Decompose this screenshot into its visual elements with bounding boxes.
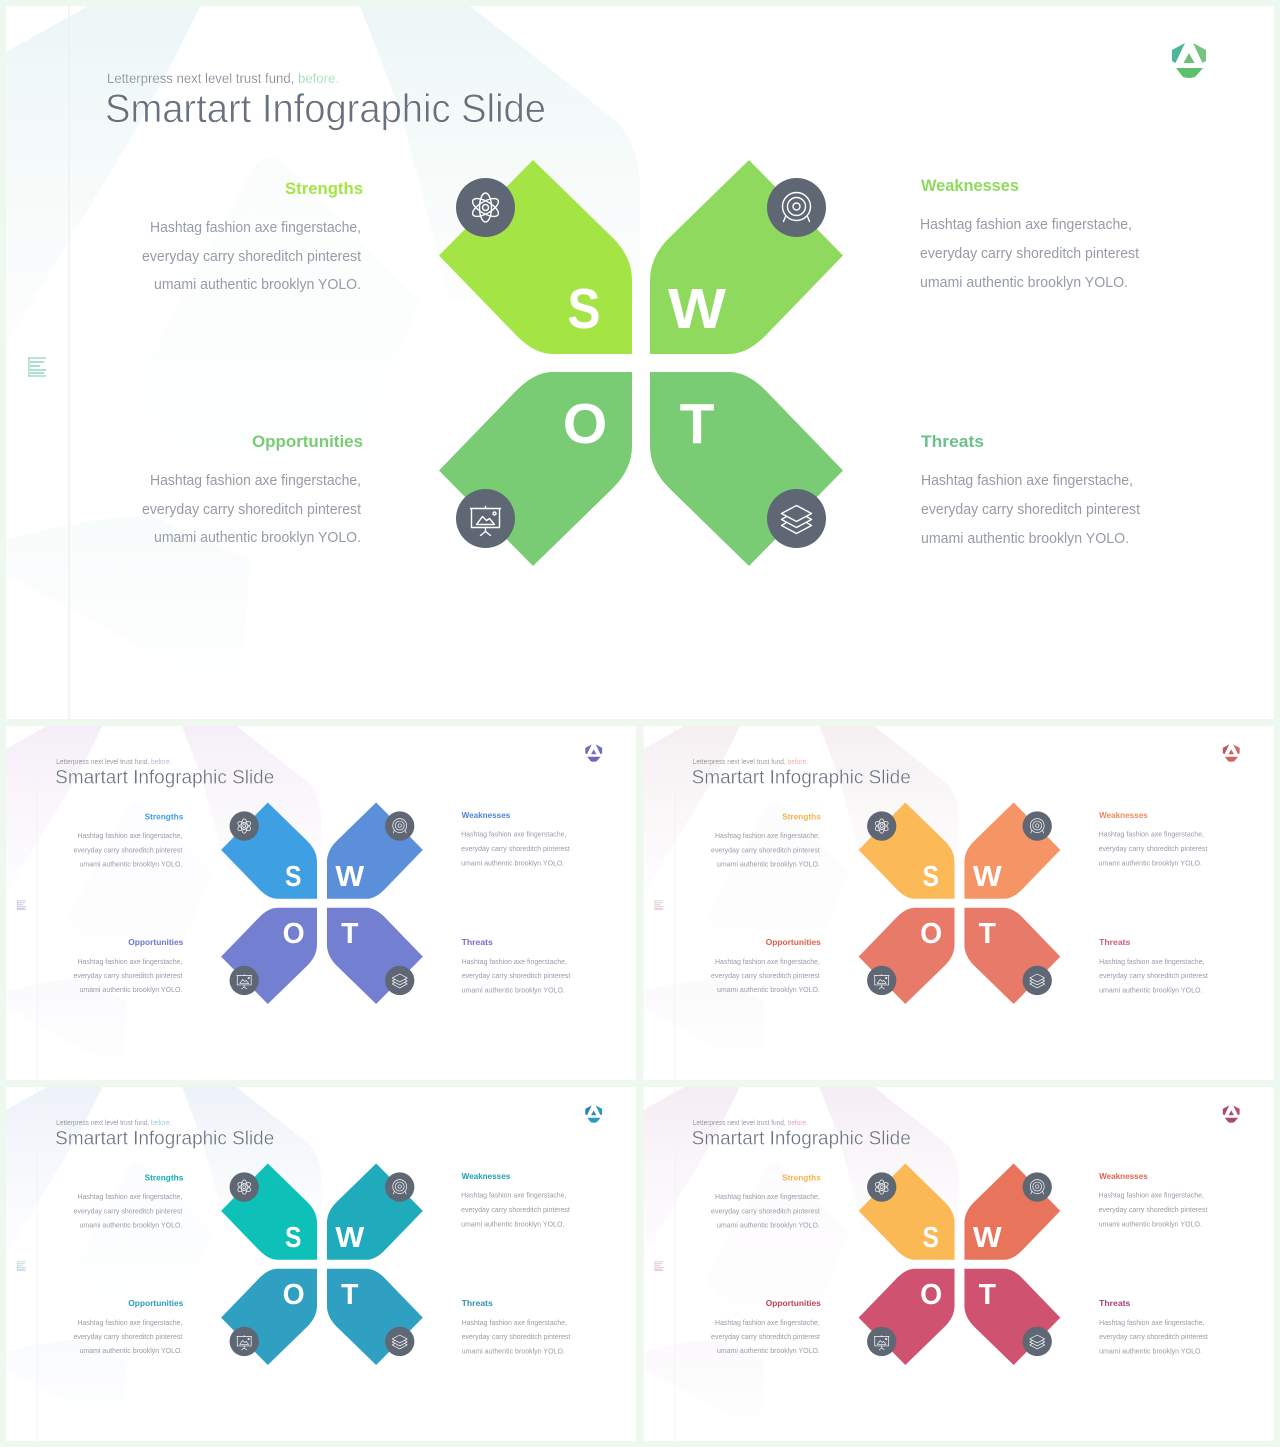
text: threats <box>1099 1298 1208 1356</box>
text: weaknesses: Weaknesses <box>462 810 511 820</box>
title: Smartart Infographic Slide <box>55 1128 274 1150</box>
icon: side menu <box>654 901 663 910</box>
text: strengths: Hashtag fashion axe fingerstache, <box>150 220 361 236</box>
icon: logo <box>1223 744 1240 762</box>
text: threats: Hashtag fashion axe fingerstache, <box>462 957 567 966</box>
icon: side menu <box>28 358 46 376</box>
text: opportunities: everyday carry shoreditch pinterest <box>74 971 182 980</box>
panel: teal slide <box>6 1087 636 1441</box>
text: opportunities: umami authentic brooklyn YOLO. <box>717 1346 820 1355</box>
text: strengths: umami authentic brooklyn YOLO. <box>80 1221 182 1230</box>
petal: opportunities <box>221 908 317 1004</box>
title: Smartart Infographic Slide <box>692 767 911 789</box>
text: opportunities: Opportunities <box>128 937 184 947</box>
text: opportunities <box>142 432 363 546</box>
petal: threats <box>964 1269 1060 1365</box>
text: threats: everyday carry shoreditch pinterest <box>462 971 570 980</box>
text: opportunities: Hashtag fashion axe fingerstache, <box>715 1318 820 1327</box>
letter S: S <box>922 1221 939 1253</box>
text: opportunities: everyday carry shoreditch pinterest <box>74 1332 182 1341</box>
text: weaknesses: everyday carry shoreditch pinterest <box>920 246 1139 262</box>
text: threats: umami authentic brooklyn YOLO. <box>462 1347 565 1356</box>
letter O: O <box>283 917 305 949</box>
icon: atom <box>456 178 515 237</box>
letter S: S <box>285 860 301 892</box>
letter W: W <box>335 1221 364 1253</box>
icon: presentation <box>456 489 515 548</box>
icon: logo <box>585 744 602 762</box>
text: strengths: everyday carry shoreditch pinterest <box>142 249 361 265</box>
text: strengths: everyday carry shoreditch pinterest <box>711 1207 820 1216</box>
petal: opportunities <box>439 372 632 566</box>
petal: weaknesses <box>964 802 1060 899</box>
icon: side menu <box>17 901 26 910</box>
text: weaknesses <box>461 1171 570 1229</box>
petal: strengths <box>221 1163 317 1260</box>
subtitle: Letterpress next level trust fund, before. <box>693 759 808 766</box>
icon: layers <box>1023 1327 1052 1356</box>
text: threats <box>462 1298 570 1356</box>
icon: atom <box>867 1172 896 1202</box>
petal: opportunities <box>859 908 954 1004</box>
text: strengths: Hashtag fashion axe fingerstache, <box>715 1192 820 1201</box>
icon: logo <box>1172 43 1206 78</box>
text: threats: umami authentic brooklyn YOLO. <box>1099 1347 1202 1356</box>
letter O: O <box>920 917 942 949</box>
text: threats: everyday carry shoreditch pinterest <box>921 502 1140 518</box>
text: strengths: umami authentic brooklyn YOLO. <box>80 860 182 869</box>
petal: threats <box>327 1269 423 1365</box>
text: weaknesses: Weaknesses <box>921 176 1019 195</box>
petal: strengths <box>859 1163 954 1260</box>
text: opportunities: Opportunities <box>766 937 821 947</box>
text: threats: Hashtag fashion axe fingerstache, <box>1099 957 1204 966</box>
title: Smartart Infographic Slide <box>692 1128 911 1150</box>
text: strengths: everyday carry shoreditch pinterest <box>711 846 820 855</box>
subtitle: Letterpress next level trust fund, before. <box>56 759 171 766</box>
text: strengths: Strengths <box>145 1172 184 1182</box>
petal: strengths <box>859 802 954 899</box>
subtitle: Letterpress next level trust fund, before. <box>693 1120 808 1127</box>
text: weaknesses: Hashtag fashion axe fingerstache, <box>461 1191 566 1200</box>
icon: target <box>385 1172 414 1202</box>
text: threats: umami authentic brooklyn YOLO. <box>921 531 1129 547</box>
text: threats: Threats <box>462 937 493 947</box>
icon: side menu <box>17 1262 26 1271</box>
text: weaknesses <box>1099 1171 1207 1229</box>
petal: strengths <box>439 160 632 354</box>
petal: opportunities <box>221 1269 317 1365</box>
letter W: W <box>668 277 726 341</box>
letter T: T <box>979 917 996 949</box>
letter T: T <box>979 1278 996 1310</box>
text: strengths <box>711 811 821 869</box>
text: strengths: Hashtag fashion axe fingerstache, <box>78 831 182 840</box>
icon: presentation <box>230 966 259 995</box>
text: threats <box>921 432 1140 547</box>
text: strengths <box>74 811 184 869</box>
icon: atom <box>230 1172 259 1202</box>
text: strengths: everyday carry shoreditch pinterest <box>74 846 182 855</box>
subtitle: Letterpress next level trust fund, before. <box>56 1120 171 1127</box>
petal: weaknesses <box>964 1163 1060 1260</box>
text: threats: Threats <box>1099 937 1131 947</box>
icon: logo <box>1223 1105 1240 1123</box>
text: opportunities: Hashtag fashion axe fingerstache, <box>150 473 361 489</box>
icon: presentation <box>867 966 896 995</box>
letter O: O <box>920 1278 942 1310</box>
title: Smartart Infographic Slide <box>105 87 546 131</box>
icon: target <box>1023 811 1052 841</box>
text: opportunities: Hashtag fashion axe fingerstache, <box>78 1318 182 1327</box>
text: threats <box>1099 937 1208 995</box>
text: weaknesses: everyday carry shoreditch pinterest <box>1099 844 1207 853</box>
petal: opportunities <box>859 1269 954 1365</box>
text: opportunities: everyday carry shoreditch pinterest <box>711 1332 820 1341</box>
text: threats: umami authentic brooklyn YOLO. <box>1099 986 1202 995</box>
text: opportunities: Opportunities <box>128 1298 184 1308</box>
petal: threats <box>964 908 1060 1004</box>
petal: weaknesses <box>327 802 423 899</box>
text: weaknesses: Hashtag fashion axe fingerstache, <box>1099 830 1204 839</box>
text: weaknesses: Weaknesses <box>1099 810 1148 820</box>
text: weaknesses <box>461 810 570 868</box>
text: opportunities: umami authentic brooklyn YOLO. <box>717 985 820 994</box>
text: threats: Hashtag fashion axe fingerstache, <box>1099 1318 1204 1327</box>
text: strengths <box>711 1172 821 1230</box>
petal: weaknesses <box>327 1163 423 1260</box>
letter T: T <box>341 917 358 949</box>
text: opportunities <box>74 1298 184 1355</box>
letter W: W <box>973 860 1002 892</box>
text: strengths: Strengths <box>782 1172 821 1182</box>
petal: weaknesses <box>650 160 843 354</box>
text: weaknesses: Weaknesses <box>462 1171 511 1181</box>
text: weaknesses: everyday carry shoreditch pinterest <box>1099 1205 1207 1214</box>
text: threats: Hashtag fashion axe fingerstache, <box>921 473 1133 489</box>
text: weaknesses: Hashtag fashion axe fingerstache, <box>461 830 566 839</box>
text: weaknesses <box>1099 810 1207 868</box>
icon: target <box>385 811 414 841</box>
text: threats <box>462 937 570 995</box>
text: strengths: everyday carry shoreditch pinterest <box>74 1207 182 1216</box>
letter O: O <box>283 1278 305 1310</box>
text: opportunities: everyday carry shoreditch pinterest <box>711 971 820 980</box>
text: weaknesses: umami authentic brooklyn YOLO. <box>1099 1220 1202 1229</box>
text: opportunities: umami authentic brooklyn YOLO. <box>80 985 182 994</box>
letter S: S <box>568 277 600 341</box>
icon: layers <box>1023 966 1052 995</box>
icon: presentation <box>230 1327 259 1356</box>
text: weaknesses: umami authentic brooklyn YOLO. <box>920 275 1128 291</box>
text: opportunities: Hashtag fashion axe fingerstache, <box>715 957 820 966</box>
panel: magenta slide <box>644 1087 1273 1441</box>
text: strengths: umami authentic brooklyn YOLO. <box>154 277 361 293</box>
icon: side menu <box>654 1262 663 1271</box>
letter T: T <box>341 1278 358 1310</box>
text: strengths <box>142 179 363 293</box>
text: weaknesses <box>920 176 1139 291</box>
icon: target <box>767 178 826 237</box>
text: opportunities: umami authentic brooklyn YOLO. <box>154 530 361 546</box>
text: opportunities: everyday carry shoreditch pinterest <box>142 502 361 518</box>
icon: atom <box>230 811 259 841</box>
icon: layers <box>767 489 826 548</box>
text: threats: Threats <box>462 1298 493 1308</box>
text: threats: Threats <box>921 432 984 451</box>
petal: strengths <box>221 802 317 899</box>
text: threats: everyday carry shoreditch pinterest <box>1099 1332 1208 1341</box>
letter T: T <box>680 392 715 456</box>
text: opportunities: Hashtag fashion axe fingerstache, <box>78 957 182 966</box>
text: weaknesses: everyday carry shoreditch pinterest <box>461 1205 570 1214</box>
icon: presentation <box>867 1327 896 1356</box>
icon: atom <box>867 811 896 841</box>
text: strengths: umami authentic brooklyn YOLO. <box>717 860 820 869</box>
panel: blue slide <box>6 726 636 1080</box>
text: threats: everyday carry shoreditch pinterest <box>1099 971 1208 980</box>
text: weaknesses: umami authentic brooklyn YOLO. <box>461 859 564 868</box>
icon: logo <box>585 1105 602 1123</box>
icon: layers <box>385 1327 414 1356</box>
text: threats: umami authentic brooklyn YOLO. <box>462 986 565 995</box>
text: opportunities: Opportunities <box>252 432 363 451</box>
panel: large green slide <box>6 6 1274 719</box>
petal: threats <box>650 372 843 566</box>
text: opportunities: umami authentic brooklyn YOLO. <box>80 1346 182 1355</box>
text: weaknesses: umami authentic brooklyn YOLO. <box>1099 859 1202 868</box>
text: strengths: Hashtag fashion axe fingerstache, <box>715 831 820 840</box>
icon: target <box>1023 1172 1052 1202</box>
letter W: W <box>973 1221 1002 1253</box>
text: opportunities: Opportunities <box>766 1298 821 1308</box>
letter O: O <box>563 392 607 456</box>
text: weaknesses: Weaknesses <box>1099 1171 1148 1181</box>
icon: layers <box>385 966 414 995</box>
text: opportunities <box>711 937 821 994</box>
text: weaknesses: umami authentic brooklyn YOLO. <box>461 1220 564 1229</box>
subtitle: Letterpress next level trust fund, before. <box>107 70 339 86</box>
text: weaknesses: everyday carry shoreditch pinterest <box>461 844 570 853</box>
text: strengths <box>74 1172 184 1230</box>
text: strengths: Hashtag fashion axe fingerstache, <box>78 1192 182 1201</box>
text: threats: everyday carry shoreditch pinterest <box>462 1332 570 1341</box>
panel: orange slide <box>644 726 1273 1080</box>
text: strengths: umami authentic brooklyn YOLO. <box>717 1221 820 1230</box>
text: opportunities <box>711 1298 821 1355</box>
text: threats: Threats <box>1099 1298 1131 1308</box>
text: strengths: Strengths <box>782 811 821 821</box>
title: Smartart Infographic Slide <box>55 767 274 789</box>
petal: threats <box>327 908 423 1004</box>
text: opportunities <box>74 937 184 994</box>
text: weaknesses: Hashtag fashion axe fingerstache, <box>1099 1191 1204 1200</box>
text: strengths: Strengths <box>285 179 363 198</box>
letter S: S <box>285 1221 301 1253</box>
text: threats: Hashtag fashion axe fingerstache, <box>462 1318 567 1327</box>
text: weaknesses: Hashtag fashion axe fingerstache, <box>920 217 1132 233</box>
text: strengths: Strengths <box>145 811 184 821</box>
letter W: W <box>335 860 364 892</box>
letter S: S <box>922 860 939 892</box>
